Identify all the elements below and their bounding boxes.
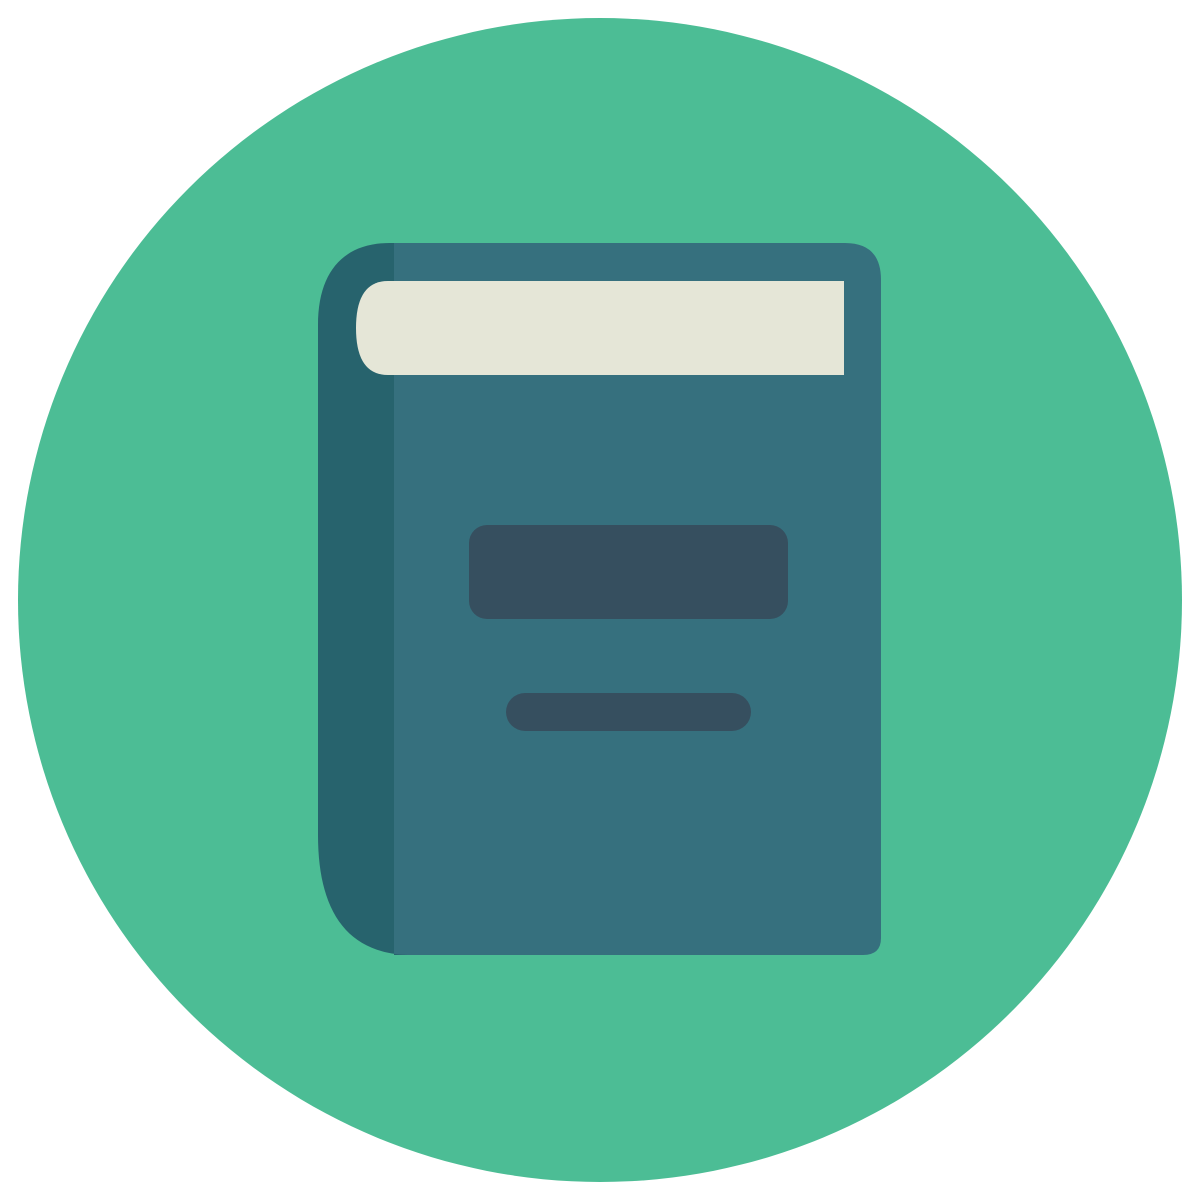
title label — [469, 525, 788, 619]
book spine — [318, 243, 412, 955]
book cover — [394, 243, 881, 955]
subtitle line — [506, 693, 751, 731]
icon: book — [318, 243, 881, 955]
pages — [356, 281, 844, 375]
